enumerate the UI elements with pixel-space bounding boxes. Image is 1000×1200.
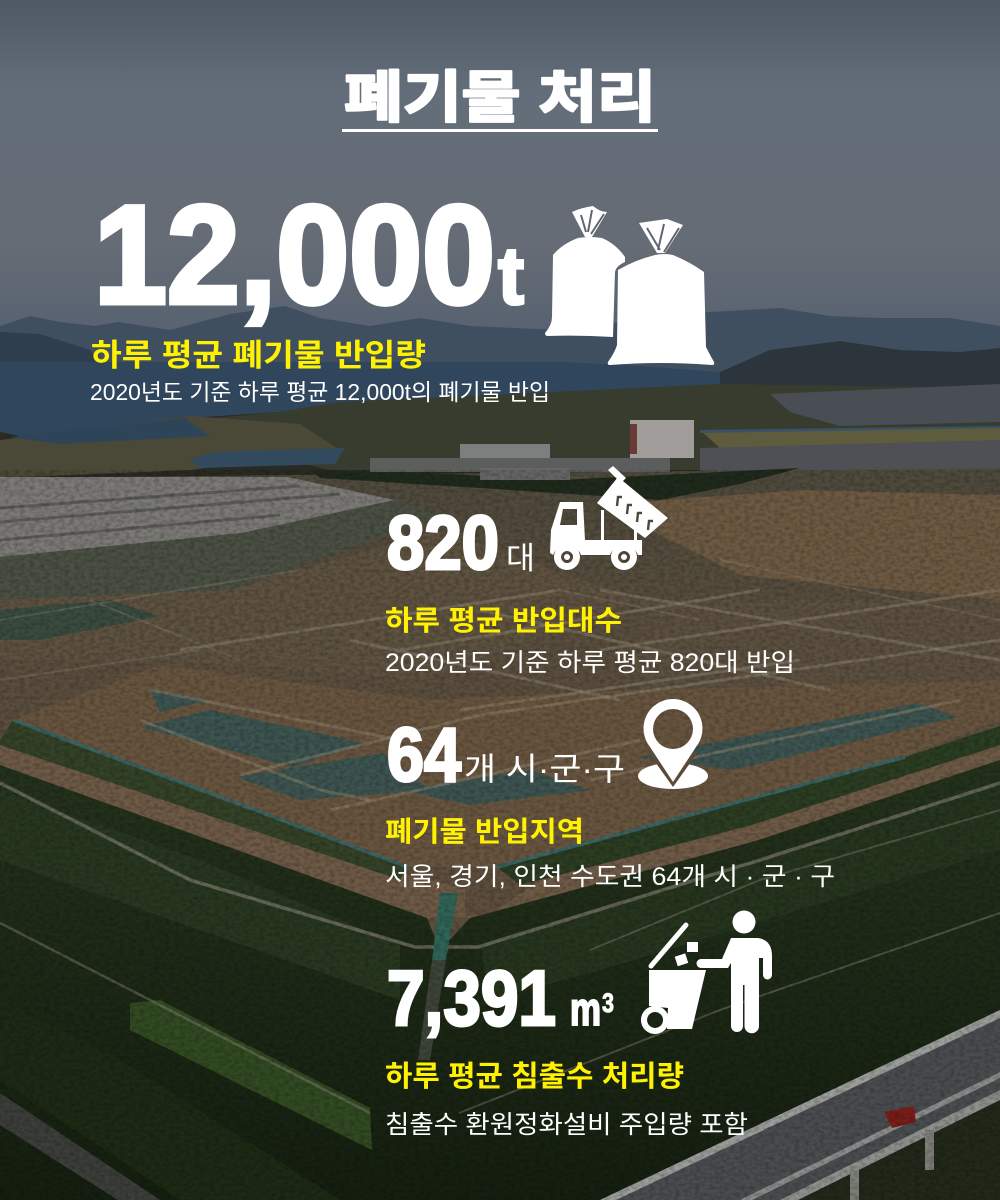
teal covered plots — [140, 690, 957, 805]
hotel and factory buildings — [370, 420, 694, 480]
stat: 64 districts — [385, 699, 835, 891]
label: waste source regions: 폐기물 반입지역 — [385, 816, 584, 847]
distant mountains — [0, 306, 1000, 390]
icon: location pin — [638, 699, 708, 789]
stat: daily waste 12,000t — [90, 176, 714, 405]
number 7,391: 3 — [602, 988, 614, 1018]
teal channel — [432, 893, 458, 960]
description: 2020년도 기준 하루 평균 820대 반입 — [385, 649, 795, 677]
number 12,000t: t — [498, 231, 524, 322]
description: 2020년도 기준 하루 평균 12,000t의 폐기물 반입 — [90, 379, 550, 405]
number 64: 개 시·군·구 — [464, 751, 625, 787]
highway — [600, 1010, 1000, 1200]
number 12,000t: 12,000 — [94, 176, 495, 333]
sky — [0, 0, 1000, 340]
number 820: 820 — [387, 501, 499, 586]
label: daily leachate treatment: 하루 평균 침출수 처리량 — [385, 1060, 684, 1093]
photo texture — [0, 470, 1000, 1200]
title: 폐기물 처리 — [344, 66, 656, 129]
number 64 — [387, 713, 625, 798]
soil plots — [0, 490, 1000, 867]
stat: 7,391 m3 leachate — [385, 910, 772, 1139]
icon: garbage bags — [545, 206, 714, 365]
water — [0, 362, 720, 436]
plot grid roads — [0, 560, 1000, 810]
light berm paths — [0, 783, 1000, 1113]
icon: person throwing trash into bin — [641, 910, 772, 1034]
label: daily average trucks: 하루 평균 반입대수 — [385, 605, 622, 636]
lower left road — [0, 1093, 160, 1200]
stat: 820 trucks — [385, 466, 795, 677]
main land — [0, 468, 1000, 960]
number 7,391: m — [570, 983, 601, 1035]
icon: dump truck — [550, 466, 668, 570]
salt flats — [0, 477, 395, 557]
tree belt — [310, 468, 800, 500]
number 7,391: 7,391 — [387, 954, 556, 1042]
green embankments — [0, 720, 408, 880]
lower soil berm — [0, 745, 1000, 918]
label: daily average waste: 하루 평균 폐기물 반입량 — [91, 338, 426, 373]
number 64: 64 — [387, 713, 461, 798]
number 820: 대 — [506, 541, 535, 576]
security fence — [13, 720, 905, 867]
far land and town — [190, 384, 1000, 470]
description: 서울, 경기, 인천 수도권 64개 시 · 군 · 구 — [385, 863, 835, 891]
description: 침출수 환원정화설비 주입량 포함 — [385, 1111, 748, 1139]
